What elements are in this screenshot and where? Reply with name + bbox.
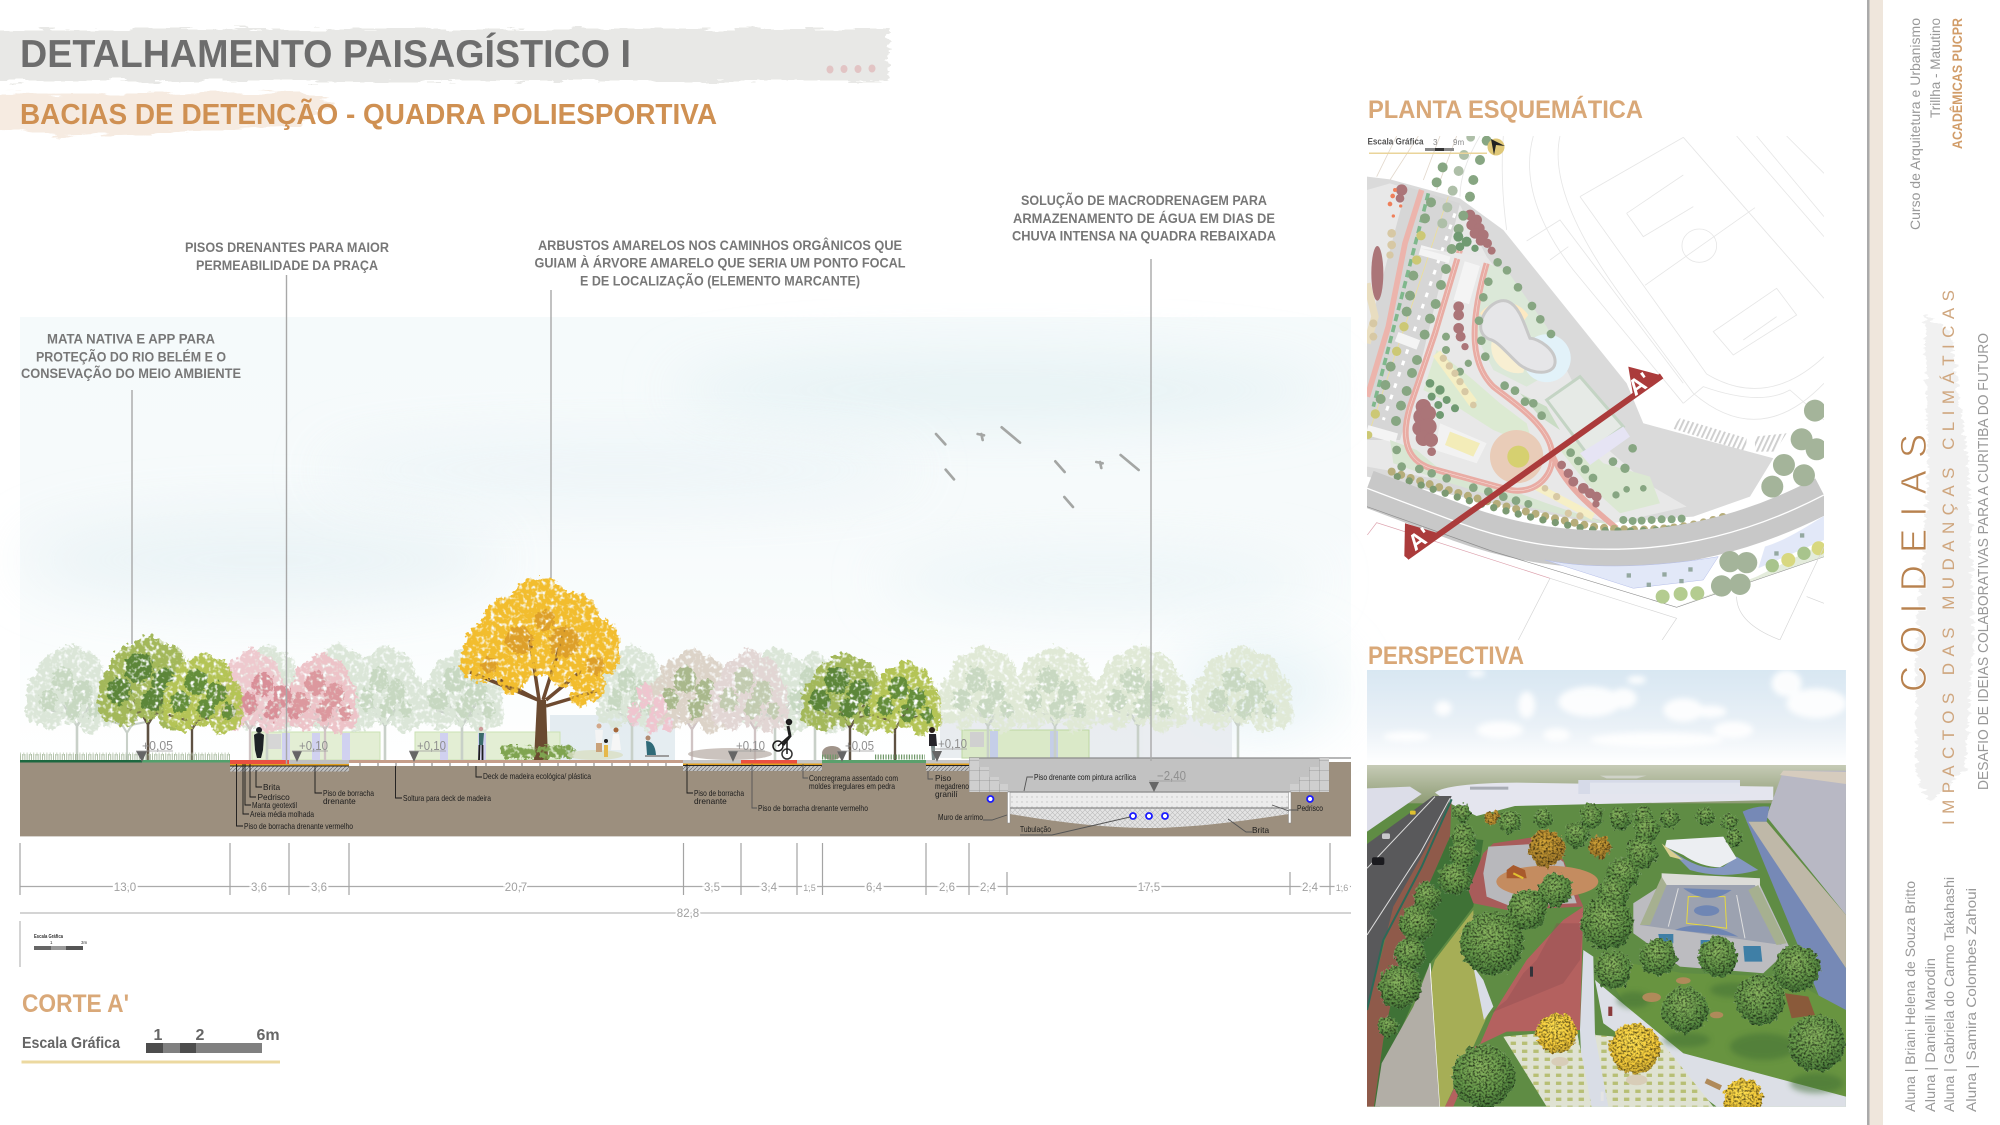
level markers: +0,10 xyxy=(938,737,967,751)
plan heading: PLANTA ESQUEMÁTICA xyxy=(1368,95,1643,124)
dimension line row: 6,4 xyxy=(866,882,883,894)
section arrow A': A' xyxy=(1623,367,1656,401)
callout: macro drainage: SOLUÇÃO DE MACRODRENAGEM PARA xyxy=(1021,193,1267,208)
ground section xyxy=(20,760,1351,837)
callout: native forest: MATA NATIVA E APP PARA xyxy=(47,332,215,346)
total dimension line: 82,8 xyxy=(677,908,699,920)
section arrow A': A' xyxy=(1403,522,1436,556)
material labels: Piso drenante com pintura acrílica xyxy=(1034,772,1136,782)
tree shadows on path xyxy=(1490,923,1583,1013)
left building xyxy=(1367,787,1422,832)
plan scale xyxy=(1368,136,1505,156)
distant white buildings xyxy=(1435,783,1773,816)
level markers: +0,05 xyxy=(845,739,874,753)
court bleachers xyxy=(1640,877,1787,945)
callout: macro drainage: CHUVA INTENSA NA QUADRA REBAIXADA xyxy=(1012,228,1276,244)
water feature xyxy=(1662,837,1758,875)
material labels: Areia média molhada xyxy=(250,809,314,819)
material labels: Pedrisco xyxy=(1297,803,1323,813)
schematic plan xyxy=(1367,136,1824,640)
sky xyxy=(1367,670,1846,765)
sidebar: authors: Aluna | Danielli Marodin xyxy=(1922,958,1938,1112)
people xyxy=(254,720,1213,792)
plan scale: 3 xyxy=(1433,138,1438,147)
level markers: +0,10 xyxy=(736,739,765,753)
road xyxy=(1367,488,1824,549)
graphic scale: 2 xyxy=(196,1027,205,1044)
picnic tables xyxy=(1642,977,1723,1090)
sidebar: challenge: DESAFIO DE IDEIAS COLABORATIVAS PARA A CURITIBA DO FUTURO xyxy=(1976,333,1992,790)
lower concrete plaza xyxy=(1633,885,1790,973)
material labels: Piso de borracha drenante vermelho xyxy=(244,821,353,831)
perspective heading: PERSPECTIVA xyxy=(1368,642,1524,670)
subtitle: BACIAS DE DETENÇÃO - QUADRA POLIESPORTIVA xyxy=(20,97,717,131)
material labels: moldes irregulares em pedra xyxy=(809,781,895,791)
callout line: native forest xyxy=(131,390,133,644)
orange trees top left xyxy=(1388,188,1402,218)
small section scale: Escala Gráfica xyxy=(34,934,63,940)
bike loop xyxy=(1406,250,1552,491)
page margin beige band xyxy=(1870,0,1883,1125)
square plaza xyxy=(1435,423,1487,463)
callout: yellow shrubs: GUIAM À ÁRVORE AMARELO QUE SERIA UM PONTO FOCAL xyxy=(534,256,906,270)
background buildings and buses xyxy=(252,715,1232,760)
vegetated slope wall xyxy=(1367,799,1452,1107)
clouds xyxy=(1383,670,1847,747)
graphic scale xyxy=(22,1027,280,1064)
small section scale: 3m xyxy=(81,940,88,945)
title brush background xyxy=(0,29,888,81)
dimension line row: 2,4 xyxy=(1302,882,1319,894)
material labels: granilí xyxy=(935,789,958,799)
large gray trees xyxy=(1711,400,1828,597)
property lines xyxy=(1367,523,1824,643)
pergola xyxy=(1785,993,1815,1018)
riverside strip xyxy=(1545,557,1718,588)
sidebar: project title: COIDEIAS xyxy=(1893,434,1934,692)
material labels: Concregrama assentado com xyxy=(809,773,898,783)
graphic scale: 1 xyxy=(154,1027,163,1044)
sidebar: authors: Aluna | Briani Helena de Souza Britto xyxy=(1902,881,1918,1112)
white curved walkway xyxy=(1595,980,1846,1107)
stadium outline xyxy=(1460,136,1824,420)
court floor xyxy=(1640,885,1782,945)
dimension line row: 2,6 xyxy=(939,882,955,894)
level markers xyxy=(136,737,1186,792)
level markers: +0,10 xyxy=(417,739,446,753)
material labels: drenante xyxy=(694,796,727,806)
material labels: drenante xyxy=(323,796,356,806)
grass paving xyxy=(1503,1030,1713,1107)
sports court in plan xyxy=(1547,377,1623,453)
right building and walkway xyxy=(1767,771,1846,915)
round plaza xyxy=(1490,430,1543,483)
pink flowering trees xyxy=(215,649,789,760)
dimension line row: 2,4 xyxy=(980,882,997,894)
sidebar: students label: ACADÊMICAS PUCPR xyxy=(1948,18,1965,149)
sidebar brush xyxy=(1916,315,1974,803)
callout: macro drainage xyxy=(1012,193,1276,244)
callout: draining floors: PERMEABILIDADE DA PRAÇA xyxy=(196,258,378,273)
highway xyxy=(1367,796,1452,1007)
ping-pong tables xyxy=(1658,934,1762,962)
dimension line row: 3,6 xyxy=(251,882,267,894)
tree shadows on lawn xyxy=(1617,983,1843,1093)
dark green belt xyxy=(1374,837,1483,1107)
yellow ipe tree xyxy=(460,578,620,760)
material labels: Piso xyxy=(935,773,952,783)
playground floor xyxy=(1496,866,1598,898)
material leader lines xyxy=(236,764,1297,835)
decorative dots xyxy=(826,64,876,74)
callout line: draining floors xyxy=(286,275,288,764)
material labels: Muro de arrimo xyxy=(938,812,983,822)
material labels: Soltura para deck de madeira xyxy=(403,793,491,803)
small section scale: 1 xyxy=(50,940,53,945)
callout line: macro drainage xyxy=(1150,259,1152,761)
dimension line row: 3,5 xyxy=(704,882,720,894)
material labels: Piso de borracha xyxy=(694,788,744,798)
court wall xyxy=(1662,873,1760,892)
drainage pipes xyxy=(988,796,1313,819)
graphic scale: Escala Gráfica xyxy=(22,1035,120,1052)
page margin gray line xyxy=(1867,0,1870,1125)
callout: macro drainage: ARMAZENAMENTO DE ÁGUA EM DIAS DE xyxy=(1013,211,1275,226)
dimension line row xyxy=(20,843,1351,895)
callout: draining floors xyxy=(185,240,389,273)
callout: yellow shrubs: E DE LOCALIZAÇÃO (ELEMENTO MARCANTE) xyxy=(580,274,860,288)
planted areas xyxy=(1473,263,1567,387)
callout: native forest: CONSEVAÇÃO DO MEIO AMBIENTE xyxy=(21,366,241,381)
subtitle brush background xyxy=(0,92,336,136)
parking block xyxy=(1454,261,1480,304)
yellow round trees xyxy=(1364,231,1426,439)
small riverside trees xyxy=(1656,541,1826,604)
callout: yellow shrubs xyxy=(534,238,906,288)
planter bases xyxy=(1551,1057,1647,1085)
material labels: Piso de borracha xyxy=(323,788,374,798)
callout: draining floors: PISOS DRENANTES PARA MAIOR xyxy=(185,240,389,255)
yellow planting strips xyxy=(1437,353,1473,403)
court markings xyxy=(1668,888,1745,938)
horizon field xyxy=(1367,765,1846,805)
material labels xyxy=(244,771,1323,835)
birds xyxy=(936,427,1139,507)
path around plaza xyxy=(1468,837,1583,910)
top access lines xyxy=(1377,136,1457,190)
site base xyxy=(1367,177,1773,523)
level markers: −2,40 xyxy=(1157,769,1186,783)
cars xyxy=(1372,811,1416,865)
shrubs xyxy=(501,745,575,759)
green trees xyxy=(1378,804,1845,1108)
sidebar: theme: IMPACTOS DAS MUDANÇAS CLIMÁTICAS xyxy=(1939,290,1958,825)
sidebar: authors xyxy=(1902,877,1979,1112)
sidebar: authors: Aluna | Samira Colombes Zahoui xyxy=(1963,888,1979,1112)
street xyxy=(1367,187,1460,440)
material labels: Deck de madeira ecológica/ plástica xyxy=(483,771,591,781)
dimension line row: 20,7 xyxy=(505,882,527,894)
material labels: Tubulação xyxy=(1020,824,1051,834)
material labels: Brita xyxy=(263,782,280,792)
dimension line row: 17,5 xyxy=(1138,882,1160,894)
green trees right xyxy=(802,653,941,760)
street trees xyxy=(1376,136,1686,525)
callout: native forest xyxy=(21,332,241,381)
perspective render xyxy=(1367,670,1846,1107)
yellow trees xyxy=(1484,811,1763,1118)
callout: yellow shrubs: ARBUSTOS AMARELOS NOS CAMINHOS ORGÂNICOS QUE xyxy=(538,238,902,253)
material labels: Manta geotextil xyxy=(252,800,297,810)
sidebar: course: Trillha - Matutino xyxy=(1927,18,1943,118)
small section scale xyxy=(20,921,88,967)
playground equipment xyxy=(1507,865,1527,878)
sidebar: authors: Aluna | Gabriela do Carmo Takahashi xyxy=(1941,877,1957,1112)
park base xyxy=(1367,803,1846,1107)
dimension line row: 3,6 xyxy=(311,882,327,894)
section arrow A' xyxy=(1403,367,1662,559)
faded background trees xyxy=(26,644,1294,760)
plan scale: 9m xyxy=(1453,138,1464,147)
callout line: yellow shrubs xyxy=(550,290,552,578)
sidebar: course: Curso de Arquitetura e Urbanismo xyxy=(1907,18,1923,230)
material labels: Pedrisco xyxy=(258,792,290,802)
green trees left xyxy=(98,636,243,760)
rocks and plants xyxy=(20,746,925,760)
white paths xyxy=(1580,950,1613,1107)
visitors xyxy=(1530,967,1612,1101)
title: DETALHAMENTO PAISAGÍSTICO I xyxy=(20,32,631,76)
dimension line row: 3,4 xyxy=(761,882,778,894)
graphic scale: 6m xyxy=(256,1027,280,1044)
dark red tree clusters xyxy=(1371,184,1602,508)
sidebar: course xyxy=(1907,18,1943,230)
red main path xyxy=(1445,907,1583,1107)
roadside planting xyxy=(1392,472,1728,531)
pond pool xyxy=(1480,302,1528,330)
dimension line row: 1,5 xyxy=(803,883,816,893)
material labels: Brita xyxy=(1252,825,1269,835)
sunken sports court xyxy=(969,758,1351,828)
paler trees along access xyxy=(1437,133,1475,228)
yellow lawn xyxy=(1431,910,1490,1107)
bike path xyxy=(1375,963,1440,1107)
main lawn xyxy=(1595,957,1846,1097)
material labels: Piso de borracha drenante vermelho xyxy=(758,803,868,813)
level markers: +0,10 xyxy=(299,739,328,753)
section sky xyxy=(20,317,1351,762)
material labels: megadreno xyxy=(935,781,969,791)
lavender deck xyxy=(1580,427,1630,465)
beige trees in strip xyxy=(1369,229,1584,520)
dense dark planting xyxy=(1426,232,1479,419)
hatched stands xyxy=(1627,418,1787,502)
dimension line row: 13,0 xyxy=(114,882,136,894)
plan scale: Escala Gráfica xyxy=(1368,136,1424,146)
callout: native forest: PROTEÇÃO DO RIO BELÉM E O xyxy=(36,350,226,364)
level markers: +0,05 xyxy=(142,739,173,753)
dimension line row: 1,6 xyxy=(1336,883,1348,893)
section heading: CORTE A' xyxy=(22,990,129,1018)
